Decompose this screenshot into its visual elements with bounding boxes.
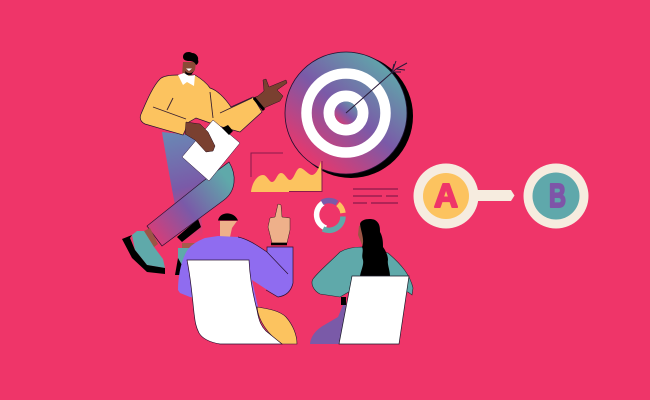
circle B	[524, 164, 588, 228]
pointing hand	[253, 79, 287, 110]
collar	[178, 73, 195, 86]
target with arrow	[285, 52, 413, 178]
person in purple sweater	[178, 204, 297, 344]
yellow seat	[257, 307, 297, 344]
back ankle	[182, 243, 205, 248]
front leg	[147, 162, 234, 246]
yellow sweater	[140, 75, 262, 135]
hand on clipboard	[185, 122, 215, 152]
shadow under front leg	[177, 219, 201, 242]
white paper	[339, 276, 409, 344]
raised hand	[268, 204, 290, 244]
arrow	[346, 61, 407, 113]
teal sweater	[312, 247, 413, 297]
hair	[360, 219, 390, 276]
man presenting	[122, 52, 287, 275]
area chart	[251, 153, 322, 192]
circle B: B	[549, 177, 566, 214]
purple skirt	[310, 305, 346, 344]
front ankle	[144, 228, 158, 247]
purple sweater	[178, 236, 293, 307]
A to B flow	[414, 164, 588, 228]
clipboard	[182, 120, 240, 181]
person in teal sweater	[310, 219, 413, 344]
text lines	[353, 189, 398, 203]
back shoe	[175, 248, 195, 275]
back leg	[162, 132, 212, 244]
white paper	[187, 260, 282, 344]
sweater fold lines	[153, 92, 252, 119]
circle A: A	[434, 177, 458, 214]
hair	[183, 52, 198, 65]
head	[218, 213, 238, 237]
connector arrow	[472, 190, 514, 201]
face	[358, 222, 368, 247]
circle A	[414, 164, 478, 228]
front shoe	[122, 231, 165, 274]
black waist	[341, 297, 346, 305]
neck and head	[182, 52, 198, 77]
donut chart	[317, 201, 343, 230]
